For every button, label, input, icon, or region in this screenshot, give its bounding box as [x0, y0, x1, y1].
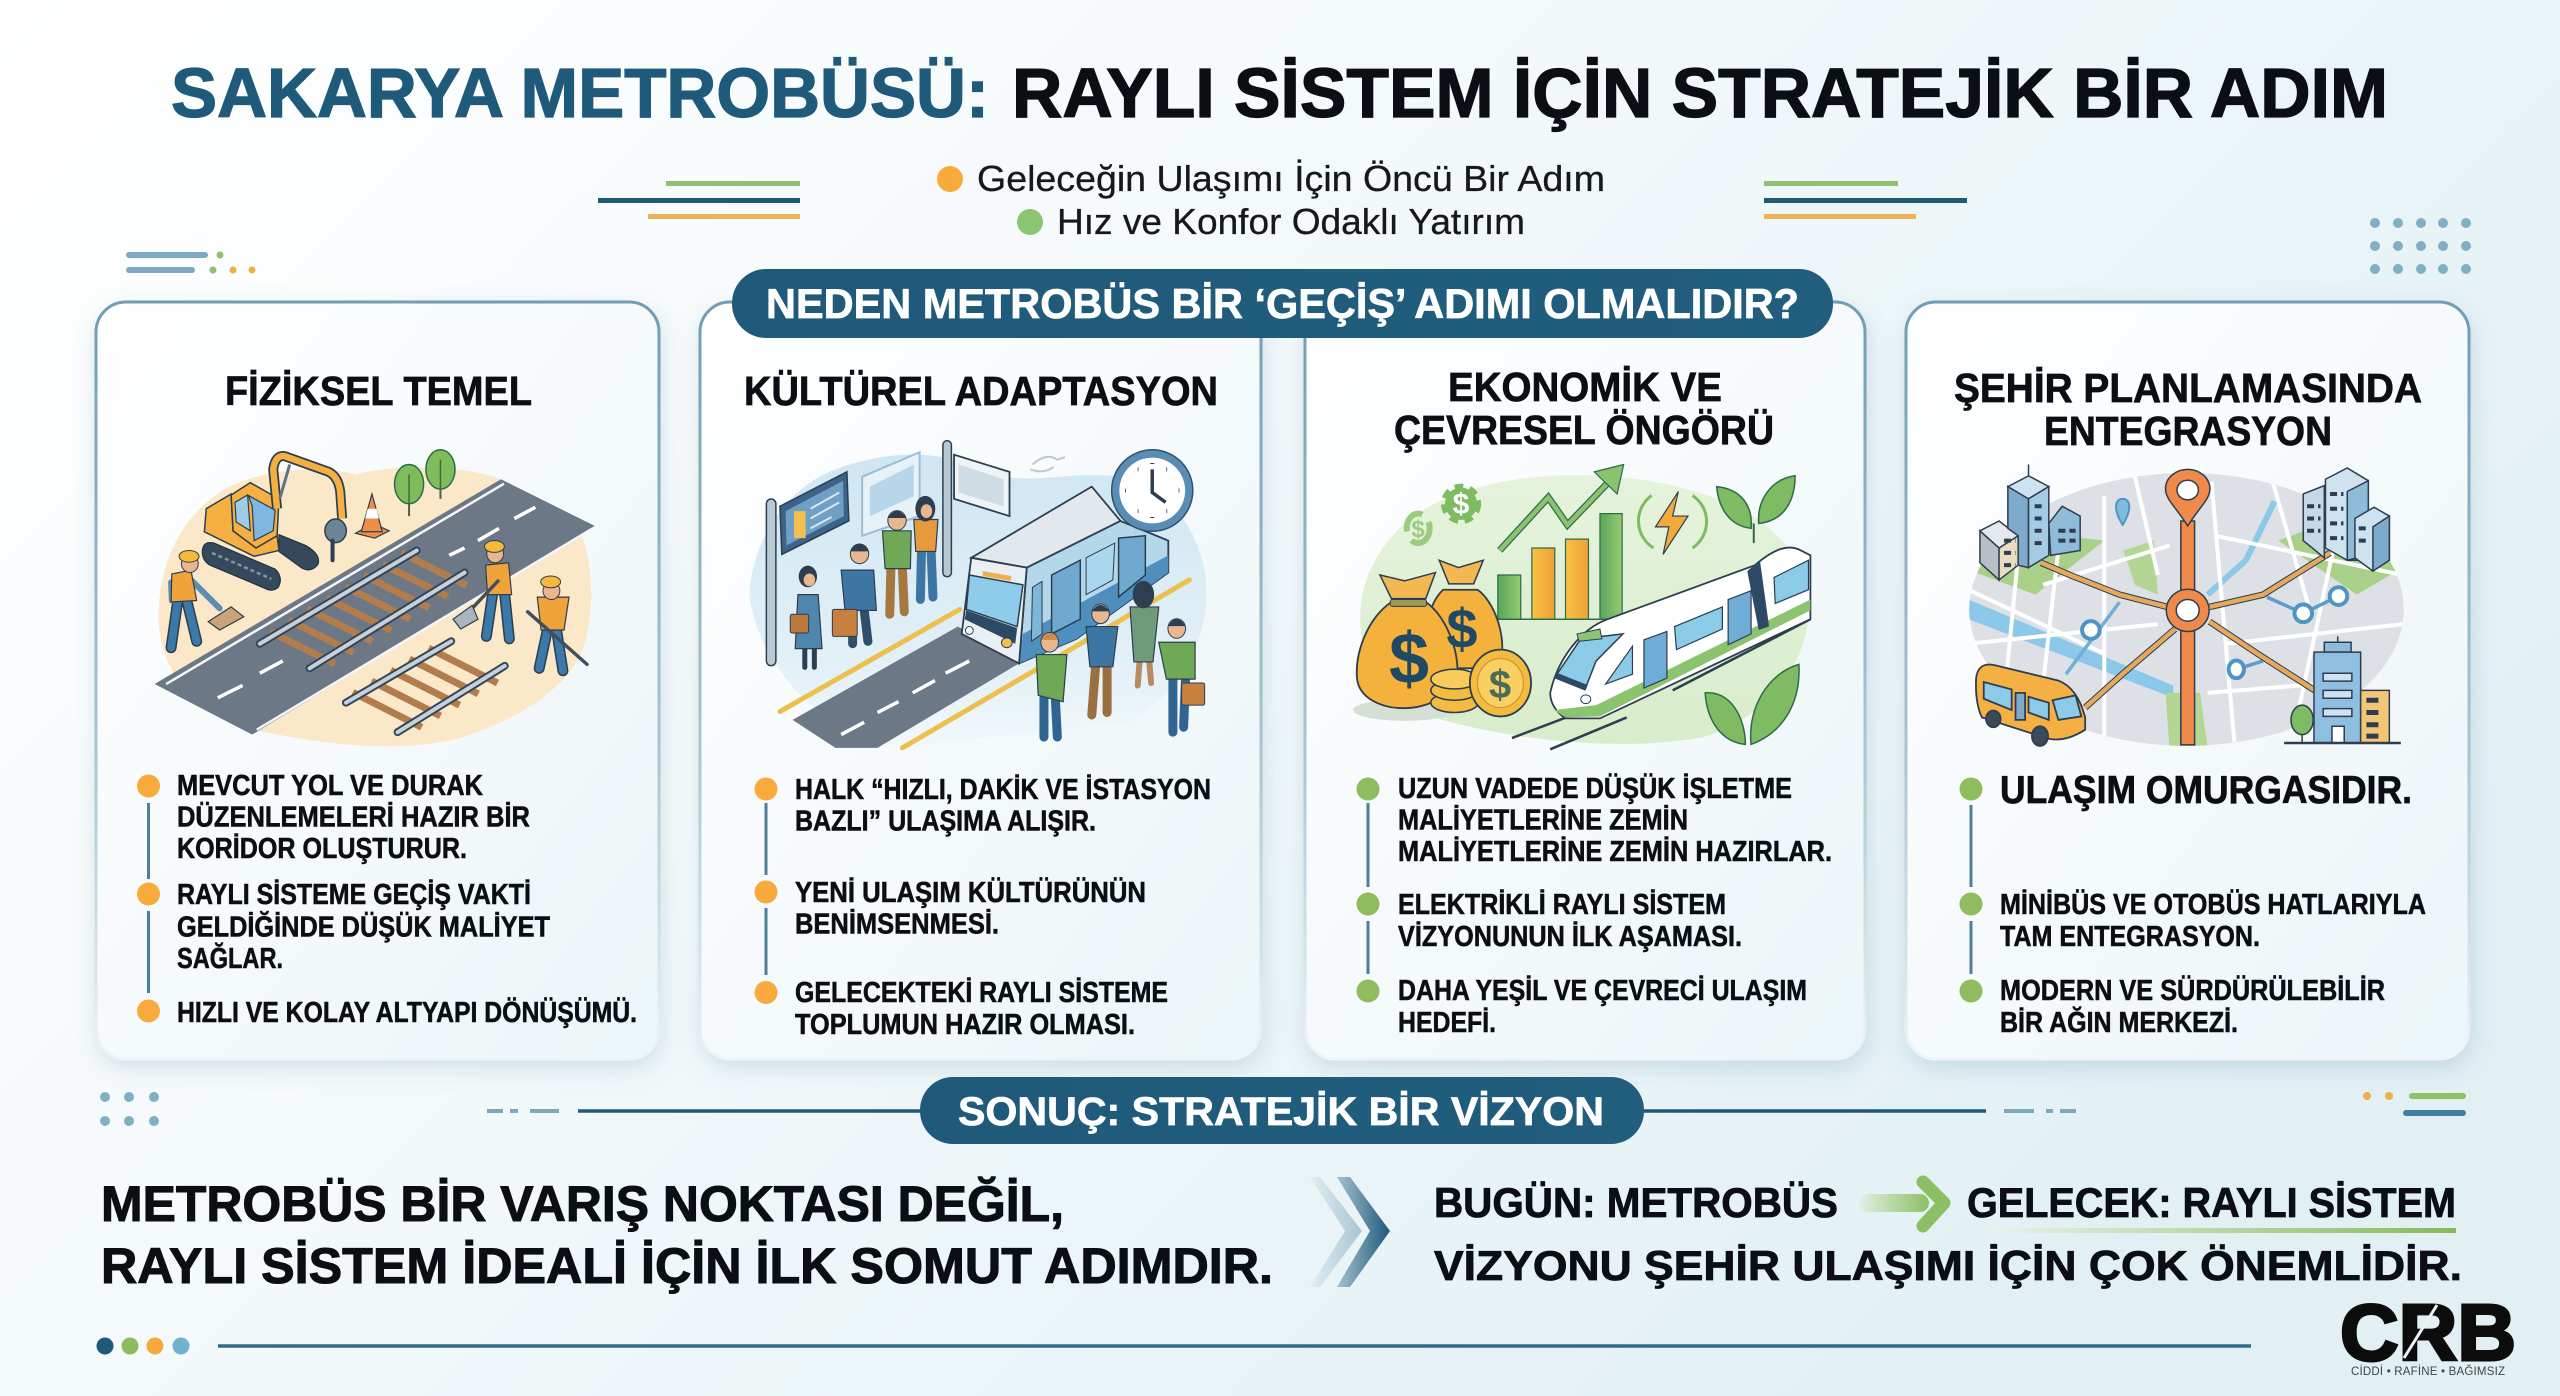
bullet timeline: Kültürel Adaptasyon: GELECEKTEKİ RAYLI SİSTEME [795, 977, 1168, 1009]
panel: Fiziksel Temel [96, 302, 659, 1059]
panel: Şehir Planlamasında Entegrasyon [1906, 302, 2469, 1059]
buildings upper left [1980, 465, 2080, 580]
heading: Kültürel Adaptasyon: KÜLTÜREL ADAPTASYON [744, 368, 1218, 414]
bus [962, 487, 1168, 663]
bullet timeline: Ekonomik ve Çevresel Öngörü [1356, 772, 1832, 1039]
title: SAKARYA METROBÜSÜ: [171, 54, 989, 132]
building lower right [2284, 636, 2401, 743]
bullet timeline: Şehir Planlamasında Entegrasyon [1960, 769, 2426, 1039]
bullet timeline: Şehir Planlamasında Entegrasyon: BİR AĞIN MERKEZİ. [2000, 1005, 2238, 1039]
bullet timeline: Ekonomik ve Çevresel Öngörü: VİZYONUNUN İLK AŞAMASI. [1398, 921, 1742, 953]
bullet timeline: Fiziksel Temel: MEVCUT YOL VE DURAK [177, 770, 483, 802]
heading: Şehir Planlamasında Entegrasyon: ŞEHİR PLANLAMASINDA [1954, 365, 2422, 411]
bullet timeline: Kültürel Adaptasyon: BENİMSENMESİ. [795, 908, 999, 940]
logo: CRB: CRB [2340, 1288, 2516, 1377]
icon: double chevron [1310, 1177, 1390, 1287]
bullet timeline: Kültürel Adaptasyon [754, 774, 1211, 1041]
heading: Şehir Planlamasında Entegrasyon [1954, 365, 2422, 454]
bullet timeline: Kültürel Adaptasyon: TOPLUMUN HAZIR OLMASI. [795, 1009, 1135, 1041]
banner: conclusion: SONUÇ: STRATEJİK BİR VİZYON [958, 1090, 1604, 1134]
passengers right [1036, 581, 1205, 737]
banner: why metrobus [732, 269, 1833, 338]
worker with shovel [453, 541, 512, 639]
banner: why metrobus: NEDEN METROBÜS BİR ‘GEÇİŞ’ ADIMI OLMALIDIR? [766, 280, 1799, 327]
conclusion divider lines [487, 1092, 2466, 1116]
bullet timeline: Fiziksel Temel: DÜZENLEMELERİ HAZIR BİR [177, 800, 530, 834]
logo: CRB: CİDDİ • RAFİNE • BAĞIMSIZ [2351, 1365, 2505, 1378]
worker with rake [528, 576, 587, 671]
illustration: money, growth chart and electric train [1353, 465, 1810, 749]
title [171, 54, 2388, 132]
bullet timeline: Fiziksel Temel [137, 770, 637, 1029]
electric train [1512, 548, 1810, 749]
heading: Şehir Planlamasında Entegrasyon: ENTEGRASYON [2044, 408, 2332, 454]
excavator [202, 456, 346, 590]
illustration: city transit map [1968, 465, 2404, 747]
conclusion text right: BUGÜN: METROBÜS [1434, 1179, 1838, 1226]
bullet timeline: Fiziksel Temel: KORİDOR OLUŞTURUR. [177, 833, 467, 865]
conclusion text left [101, 1176, 1273, 1294]
clock [1112, 450, 1193, 531]
panel: Kültürel Adaptasyon [700, 302, 1261, 1059]
bullet timeline: Şehir Planlamasında Entegrasyon: TAM ENTEGRASYON. [2000, 921, 2260, 953]
worker with tamper [171, 550, 244, 648]
banner: conclusion [920, 1077, 1644, 1144]
illustration: money, growth chart and electric train: $ [1453, 488, 1470, 521]
conclusion text left: METROBÜS BİR VARIŞ NOKTASI DEĞİL, [101, 1176, 1064, 1232]
bus [1976, 665, 2085, 746]
buildings upper right [2303, 468, 2389, 571]
conclusion text right: GELECEK: RAYLI SİSTEM [1967, 1179, 2456, 1226]
subtitle: Geleceğin Ulaşımı İçin Öncü Bir Adım [977, 158, 1605, 199]
footer dots and line [96, 1338, 2251, 1354]
bullet timeline: Kültürel Adaptasyon: HALK “HIZLI, DAKİK VE İSTASYON [795, 774, 1211, 806]
bullet timeline: Şehir Planlamasında Entegrasyon: MODERN VE SÜRDÜRÜLEBİLİR [2000, 974, 2385, 1007]
bullet timeline: Ekonomik ve Çevresel Öngörü: ELEKTRİKLİ RAYLI SİSTEM [1398, 889, 1726, 921]
illustration: station, bus and passengers [749, 445, 1207, 748]
heading: Ekonomik ve Çevresel Öngörü: EKONOMİK VE [1448, 364, 1722, 410]
illustration: money, growth chart and electric train: $ [1389, 619, 1429, 699]
illustration: money, growth chart and electric train: $ [1411, 516, 1425, 543]
bullet timeline: Fiziksel Temel: HIZLI VE KOLAY ALTYAPI DÖNÜŞÜMÜ. [177, 996, 637, 1029]
panel: Ekonomik ve Çevresel Öngörü [1305, 302, 1865, 1059]
arrow: today to future [1859, 1182, 1944, 1226]
bullet timeline: Kültürel Adaptasyon: YENİ ULAŞIM KÜLTÜRÜNÜN [795, 876, 1146, 909]
bullet timeline: Ekonomik ve Çevresel Öngörü: MALİYETLERİNE ZEMİN [1398, 804, 1688, 836]
bullet timeline: Ekonomik ve Çevresel Öngörü: MALİYETLERİNE ZEMİN HAZIRLAR. [1398, 836, 1832, 868]
bullet timeline: Kültürel Adaptasyon: BAZLI” ULAŞIMA ALIŞIR. [795, 806, 1096, 838]
heading: Fiziksel Temel: FİZİKSEL TEMEL [225, 368, 532, 414]
conclusion text right [1434, 1179, 2462, 1289]
heading: Ekonomik ve Çevresel Öngörü [1394, 364, 1774, 453]
illustration: money, growth chart and electric train: $ [1446, 597, 1478, 660]
passengers left [790, 496, 938, 667]
title: RAYLI SİSTEM İÇİN STRATEJİK BİR ADIM [1012, 54, 2388, 132]
bullet timeline: Şehir Planlamasında Entegrasyon: MİNİBÜS VE OTOBÜS HATLARIYLA [2000, 888, 2426, 921]
bullet timeline: Ekonomik ve Çevresel Öngörü: DAHA YEŞİL VE ÇEVRECİ ULAŞIM [1398, 975, 1807, 1007]
bullet timeline: Şehir Planlamasında Entegrasyon: ULAŞIM OMURGASIDIR. [2000, 769, 2412, 812]
bullet timeline: Fiziksel Temel: SAĞLAR. [177, 941, 283, 975]
conclusion text left: RAYLI SİSTEM İDEALİ İÇİN İLK SOMUT ADIMDIR. [101, 1238, 1273, 1294]
illustration: money, growth chart and electric train: $ [1489, 663, 1511, 707]
bullet timeline: Fiziksel Temel: RAYLI SİSTEME GEÇİŞ VAKTİ [177, 879, 531, 911]
subtitle [937, 158, 1605, 242]
bullet timeline: Fiziksel Temel: GELDİĞİNDE DÜŞÜK MALİYET [177, 910, 550, 944]
subtitle: Hız ve Konfor Odaklı Yatırım [1057, 201, 1525, 242]
conclusion text right: VİZYONU ŞEHİR ULAŞIMI İÇİN ÇOK ÖNEMLİDİR. [1434, 1242, 2462, 1289]
heading: Ekonomik ve Çevresel Öngörü: ÇEVRESEL ÖNGÖRÜ [1394, 407, 1774, 453]
illustration: road works and rails [155, 450, 595, 746]
bullet timeline: Ekonomik ve Çevresel Öngörü: HEDEFİ. [1398, 1007, 1496, 1039]
bullet timeline: Ekonomik ve Çevresel Öngörü: UZUN VADEDE DÜŞÜK İŞLETME [1398, 772, 1792, 805]
orange axis and pin [2166, 469, 2210, 745]
money bags [1353, 560, 1531, 721]
